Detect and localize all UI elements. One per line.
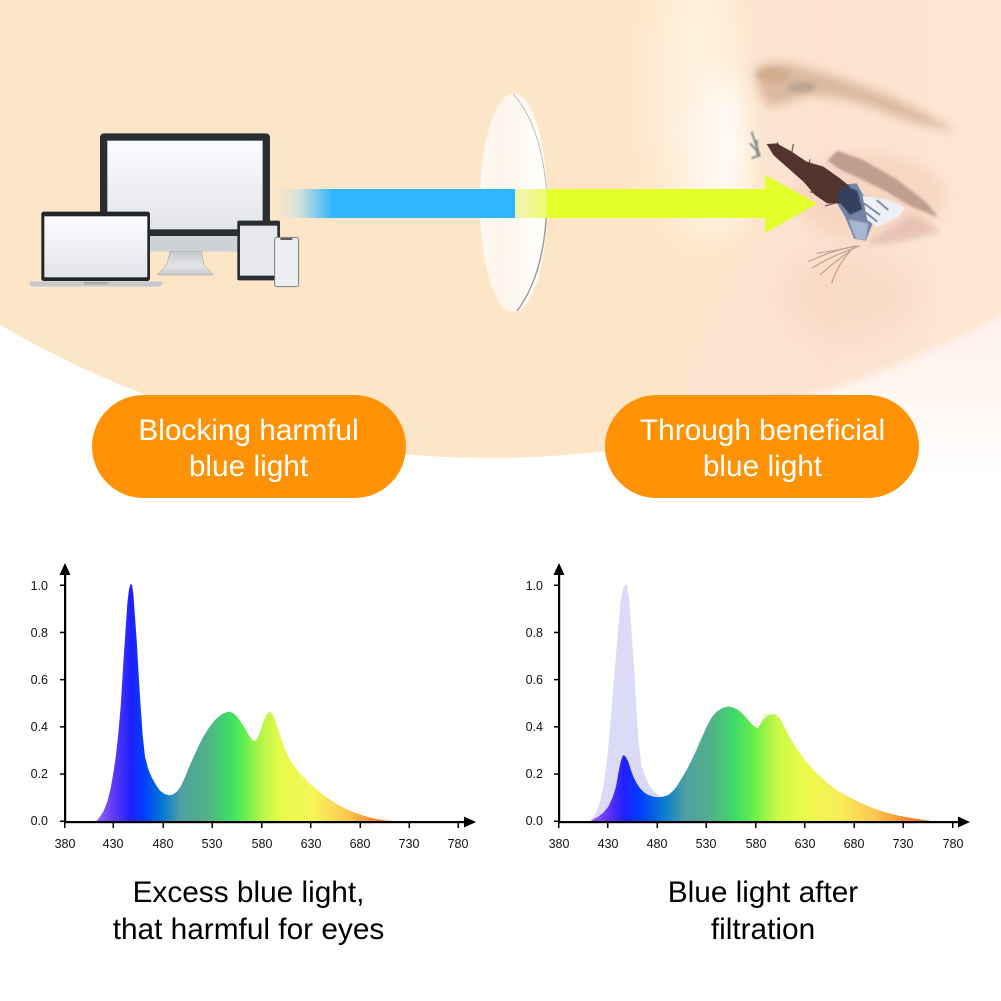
- y axis labels: 0.0: [526, 814, 543, 828]
- original spectrum ghost: [590, 584, 777, 822]
- y axis labels: 1.0: [31, 579, 48, 593]
- x axis labels: 630: [795, 837, 815, 851]
- smartphone: [275, 237, 299, 287]
- peach background shape: [0, 0, 1001, 458]
- y axis labels: 0.4: [31, 720, 48, 734]
- caption: excess blue light: [113, 876, 384, 946]
- x axis: [558, 816, 970, 828]
- y axis labels: 0.8: [31, 626, 48, 640]
- spectrum area: [96, 584, 410, 822]
- iris: [835, 183, 873, 241]
- lower lashes: [808, 246, 860, 283]
- x axis labels: 380: [549, 837, 569, 851]
- chart: unfiltered spectrum: [31, 563, 476, 851]
- filtered spectrum area: [589, 706, 937, 822]
- lens: [480, 94, 547, 312]
- x axis labels: 580: [252, 837, 272, 851]
- y axis: [60, 563, 70, 823]
- x axis: [64, 816, 476, 828]
- x axis labels: 780: [448, 837, 468, 851]
- y axis: [554, 563, 564, 823]
- x axis labels: 580: [746, 837, 766, 851]
- blue light beam: [275, 189, 515, 218]
- x axis labels: 730: [893, 837, 913, 851]
- caption: blue light after filtration: filtration: [711, 913, 815, 946]
- face skin: [685, 0, 1001, 560]
- y axis labels: 0.6: [526, 673, 543, 687]
- y axis labels: 0.2: [31, 767, 48, 781]
- x axis labels: 430: [103, 837, 123, 851]
- x axis labels: 530: [696, 837, 716, 851]
- laptop: [29, 212, 163, 287]
- y axis labels: 1.0: [526, 579, 543, 593]
- light fade beneath the jaw: [790, 305, 1001, 560]
- y axis labels: 0.2: [526, 767, 543, 781]
- lower lid shadow: [868, 215, 940, 245]
- x axis labels: 380: [55, 837, 75, 851]
- eyebrow: [755, 62, 957, 132]
- x axis labels: 680: [350, 837, 370, 851]
- bright glow beside the face: [655, 0, 748, 240]
- x axis labels: 630: [301, 837, 321, 851]
- pill: through beneficial blue light: [605, 395, 919, 498]
- x axis labels: [55, 837, 468, 851]
- caption: excess blue light: that harmful for eyes: [113, 913, 384, 946]
- y axis labels: 0.6: [31, 673, 48, 687]
- x axis labels: 780: [943, 837, 963, 851]
- x axis labels: 730: [399, 837, 419, 851]
- x axis labels: 530: [202, 837, 222, 851]
- y axis labels: 0.4: [526, 720, 543, 734]
- pill: through beneficial blue light: blue light: [703, 450, 823, 483]
- filtered light arrow: [515, 175, 817, 233]
- caption: blue light after filtration: [668, 876, 858, 946]
- x axis labels: 430: [598, 837, 618, 851]
- x axis labels: 480: [647, 837, 667, 851]
- eye socket shading: [793, 153, 947, 240]
- cheek shading: [780, 250, 920, 340]
- pill: through beneficial blue light: Through beneficial: [640, 414, 885, 447]
- pill: blocking harmful blue light: Blocking harmful: [138, 414, 359, 447]
- sclera: [863, 196, 905, 227]
- upper eyelid: [827, 151, 938, 217]
- outer stray lashes: [750, 132, 760, 158]
- eye region: [750, 132, 947, 283]
- pill: blocking harmful blue light: [92, 395, 406, 498]
- y axis labels: 0.8: [526, 626, 543, 640]
- screen devices: [29, 133, 299, 287]
- pale iris edge: [848, 219, 868, 240]
- y axis labels: 0.0: [31, 814, 48, 828]
- caption: blue light after filtration: Blue light after: [668, 876, 858, 909]
- x axis labels: 480: [153, 837, 173, 851]
- chart: filtered spectrum: [526, 563, 970, 851]
- upper lashes: [767, 142, 862, 215]
- y axis labels: [526, 579, 543, 828]
- desktop monitor: [100, 133, 270, 275]
- x axis labels: 680: [844, 837, 864, 851]
- y axis labels: [31, 579, 48, 828]
- pill: blocking harmful blue light: blue light: [189, 450, 309, 483]
- x axis labels: [549, 837, 963, 851]
- caption: excess blue light: Excess blue light,: [133, 876, 364, 909]
- tablet: [237, 221, 280, 280]
